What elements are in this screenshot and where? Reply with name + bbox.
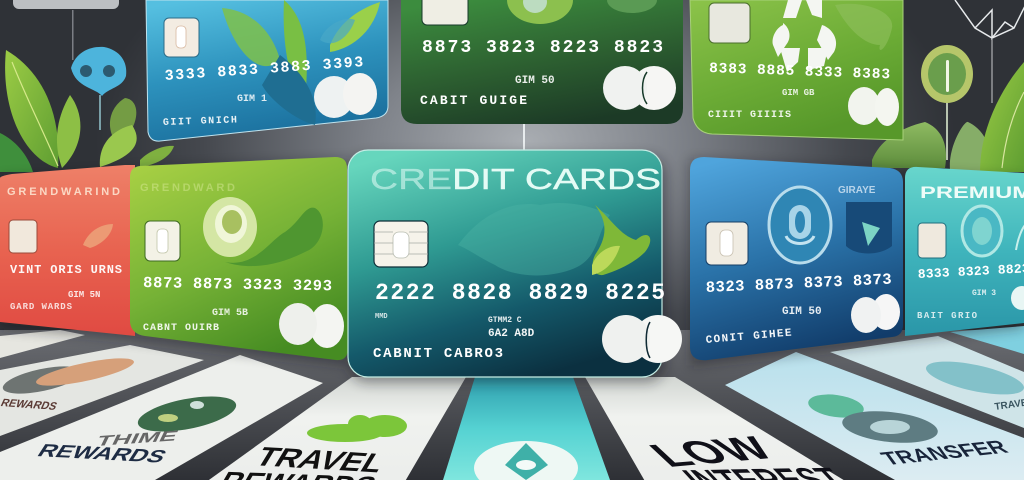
expiry: 6A2 A8D bbox=[488, 328, 535, 340]
icon: twin circles bbox=[848, 87, 899, 126]
label: REWARDS bbox=[33, 441, 171, 467]
option strip: far-left sliver bbox=[0, 330, 85, 358]
chip bbox=[164, 18, 199, 57]
icon: twin circles bbox=[603, 66, 676, 110]
icon: ring emblem bbox=[962, 206, 1024, 256]
card: red bbox=[0, 165, 135, 336]
icon: microphone ring bbox=[769, 187, 831, 263]
icon: green emblem bbox=[135, 390, 239, 438]
chip bbox=[374, 221, 428, 267]
card: top green bbox=[690, 0, 903, 140]
icon: diamond outline bbox=[955, 0, 1024, 103]
card: centre credit card bbox=[348, 150, 682, 377]
option strip: balance transfer bbox=[725, 352, 1024, 480]
icon: swirl emblem bbox=[203, 197, 323, 266]
label: LOW bbox=[639, 430, 784, 474]
heading: CRE DIT CARDS bbox=[370, 164, 661, 196]
card number: 8323 8873 8373 8373 bbox=[705, 271, 892, 297]
icon: recycle arrows bbox=[773, 0, 836, 72]
label: REWARDS bbox=[0, 398, 59, 413]
card label: BAIT GRIO bbox=[917, 311, 978, 321]
icon: dark emblem bbox=[846, 202, 892, 254]
chip bbox=[709, 3, 750, 43]
card number: 8873 3823 8223 8823 bbox=[422, 38, 663, 58]
label: TRANSFER bbox=[877, 437, 1013, 469]
heading: GIRAYE bbox=[838, 185, 876, 196]
expiry: GIM 3 bbox=[972, 289, 996, 298]
option strip: rewards 1 bbox=[0, 345, 204, 436]
icon: leaves bbox=[835, 4, 892, 50]
label: upper line: THIME bbox=[93, 428, 181, 450]
icon: leaves bbox=[222, 0, 380, 125]
icon: teal emblem bbox=[923, 355, 1024, 401]
left foliage bbox=[0, 0, 174, 172]
card: teal premium bbox=[905, 167, 1024, 336]
icon: twin circles bbox=[851, 294, 900, 333]
expiry: GIM GB bbox=[782, 88, 815, 98]
expiry bbox=[488, 316, 535, 340]
card label: GIIT GNICH bbox=[163, 115, 237, 129]
option strip: low interest bbox=[585, 377, 860, 480]
icon: blue leaf badge bbox=[71, 47, 126, 130]
card shadows bbox=[0, 155, 1024, 383]
card: top dark green bbox=[401, 0, 683, 124]
icon: eye emblem bbox=[807, 391, 939, 447]
icon: twin circles bbox=[314, 73, 377, 118]
icon: emblem bbox=[507, 0, 657, 24]
option strip: travel rewards bbox=[195, 377, 466, 480]
option strip: premium bbox=[830, 336, 1024, 428]
expiry: GIM 50 bbox=[515, 75, 555, 87]
chip bbox=[145, 221, 180, 261]
chip bbox=[706, 222, 748, 265]
card: lime green bbox=[130, 157, 348, 360]
card label: CONIT GIHEE bbox=[705, 328, 792, 347]
expiry: GIM 50 bbox=[782, 306, 822, 318]
card label: CABNIT CABRO3 bbox=[373, 346, 503, 362]
card number: 8383 8885 8333 8383 bbox=[709, 61, 890, 83]
card label: CABNT OUIRB bbox=[143, 323, 219, 334]
card number: 2222 8828 8829 8225 bbox=[375, 280, 665, 306]
card: top blue bbox=[146, 0, 388, 141]
heading: GRENDWARIND bbox=[7, 186, 120, 198]
floor bbox=[0, 330, 1024, 480]
right foliage bbox=[872, 0, 1024, 172]
icon: twin circles bbox=[602, 315, 682, 363]
heading: PREMIUM bbox=[920, 183, 1024, 202]
icon: abstract wave and leaf bbox=[458, 203, 650, 275]
leaf: large bbox=[5, 50, 58, 168]
option strip: centre teal bbox=[443, 377, 610, 480]
connector line bbox=[523, 124, 525, 151]
chip bbox=[918, 223, 946, 258]
icon: twin circles bbox=[279, 303, 344, 348]
option strip: rewards 2 bbox=[0, 355, 323, 480]
label: TRAVEL bbox=[249, 442, 392, 479]
icon: green ring badge bbox=[921, 45, 973, 160]
icon: circle bbox=[1011, 286, 1024, 310]
chip bbox=[9, 220, 37, 253]
chip bbox=[422, 0, 468, 25]
card: blue bbox=[690, 157, 903, 360]
card label: GARD WARDS bbox=[10, 302, 73, 312]
card label: CABIT GUIGE bbox=[420, 93, 527, 108]
icon: swirl bbox=[1, 353, 136, 399]
icon: green leaves bbox=[307, 415, 407, 442]
expiry: GIM 5B bbox=[212, 308, 248, 319]
expiry: GTMM2 C bbox=[488, 316, 522, 325]
expiry: GIM 5N bbox=[68, 290, 100, 300]
icon: orange mark bbox=[83, 224, 113, 248]
icon: flower emblem bbox=[474, 441, 578, 480]
heading: GRENDWARD bbox=[140, 182, 235, 194]
card number: VINT ORIS URNS bbox=[10, 263, 122, 277]
icon: grey card stub bbox=[13, 0, 119, 9]
expiry: GIM 1 bbox=[237, 94, 267, 105]
leaf: cluster bbox=[872, 122, 946, 168]
card label: CIIIT GIIIIS bbox=[708, 110, 791, 121]
small label: MMD bbox=[375, 313, 388, 321]
card number: 3333 8833 3883 3393 bbox=[164, 54, 364, 85]
card number: 8873 8873 3323 3293 bbox=[143, 274, 332, 295]
option strip: far-right sliver bbox=[950, 326, 1024, 354]
